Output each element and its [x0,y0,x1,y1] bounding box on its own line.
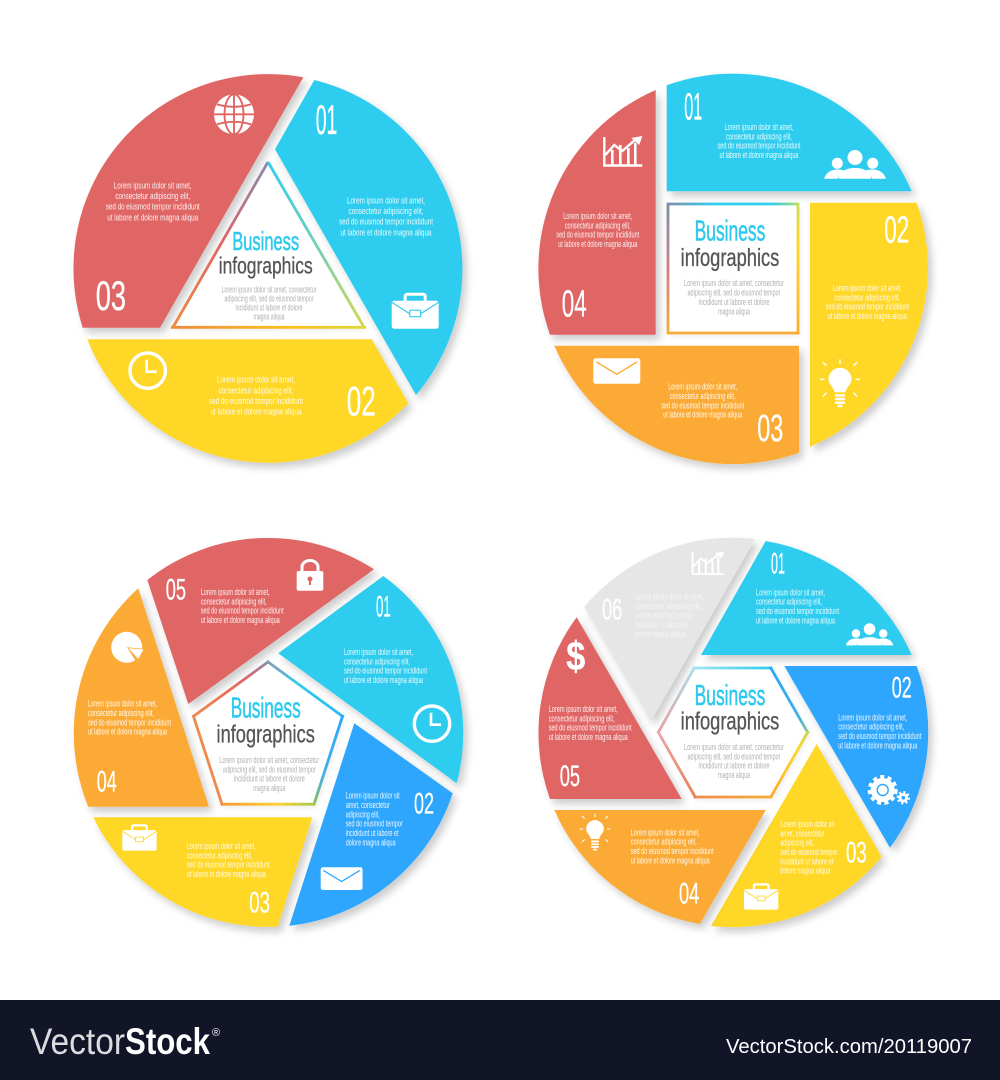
segment 03 red: sed do eiusmod tempor incididunt [106,202,200,213]
center pentagon: adipiscing elit, sed do eiusmod tempor [223,764,316,774]
center hexagon: Business [695,680,765,712]
center hexagon: adipiscing elit, sed do eiusmod tempor [688,751,780,761]
segment 02 yellow [810,203,928,447]
footer bar: VectorStock.com/20119007 [726,1036,972,1058]
segment 03 yellow: Lorem ipsum dolor sit amet, [187,841,256,851]
segment 03 red [73,74,303,328]
segment 01 blue: ut labore et dolore magna aliqua [720,150,798,160]
segment 02 blue: incididunt ut labore et [346,828,399,838]
segment 02 blue: Lorem ipsum dolor sit [346,791,400,801]
segment 04 orange: sed do eiusmod tempor incididunt [631,846,714,856]
segment 04 red: Lorem ipsum dolor sit amet, [563,211,632,221]
segment 02 blue: ut labore et dolore magna aliqua [838,740,917,750]
footer bar: Vector [30,1021,125,1062]
segment 01 cyan [701,541,912,655]
footer bar [0,1000,1000,1080]
segment 01 cyan: Lorem ipsum dolor sit amet, [344,647,413,657]
panel: three-step circle [73,74,462,463]
segment 06 grey [584,538,755,721]
segment 04 orange [554,810,766,924]
center triangle: infographics [219,252,313,278]
center square: Lorem ipsum dolor sit amet, consectetur [684,278,784,288]
segment 04 orange: 04 [679,877,699,910]
segment 01 cyan: ut labore et dolore magna aliqua [344,675,423,685]
center hexagon: incididunt ut labore et dolore [698,761,770,771]
segment 03 yellow: consectetur adipiscing elit, [187,850,253,860]
segment 02 yellow: sed do eiusmod tempor incididunt [209,396,303,407]
segment 01 cyan: Lorem ipsum dolor sit amet, [756,587,825,597]
panel: four-step circle [538,74,928,464]
segment 03 orange: Lorem ipsum dolor sit amet, [668,382,737,392]
center pentagon: incididunt ut labore et dolore [234,774,305,784]
icon: dollar sign: $ [566,633,585,679]
segment 05 red: consectetur adipiscing elit, [549,713,615,723]
segment 03 yellow [93,817,312,927]
segment 01 blue: Lorem ipsum dolor sit amet, [724,122,794,132]
segment 02 yellow: sed do eiusmod tempor incididunt [826,302,909,312]
segment 01 cyan: 01 [376,591,391,624]
segment 02 blue: 02 [892,672,912,705]
segment 05 red: 05 [166,574,186,607]
panel: five-step circle [74,538,463,927]
segment 03 yellow: adipiscing elit, [780,838,814,848]
segment 03 orange: sed do eiusmod tempor incididunt [661,400,745,410]
segment 05 red: consectetur adipiscing elit, [201,596,267,606]
segment 05 red: Lorem ipsum dolor sit amet, [201,587,270,597]
segment 03 yellow: dolore magna aliqua [780,866,830,876]
segment 01 cyan: consectetur adipiscing elit, [756,597,822,607]
segment 01 blue: consectetur adipiscing elit, [348,206,424,217]
segment 01 blue: 01 [684,86,702,128]
center hexagon: magna aliqua [718,770,750,780]
segment 03 red: ut labore et dolore magna aliqua [107,212,199,223]
segment 02 blue [784,666,928,848]
icon: padlock [297,560,323,591]
segment 04 red: consectetur adipiscing elit, [565,220,631,230]
segment 01 cyan: consectetur adipiscing elit, [344,656,410,666]
segment 02 blue: consectetur adipiscing elit, [838,722,904,732]
center hexagon [658,668,808,797]
segment 04 orange: consectetur adipiscing elit, [88,708,154,718]
segment 02 yellow: 02 [347,378,376,425]
segment 03 yellow: amet, consectetur [780,828,824,838]
segment 02 yellow: ut labore et dolore magna aliqua [210,407,302,418]
segment 02 blue: adipiscing elit, [346,809,380,819]
segment 01 cyan: 01 [771,548,785,581]
segment 06 grey: sed do eiusmod tempor [635,610,692,620]
segment 06 grey: dolore magna aliqua [635,629,685,639]
center pentagon [194,662,342,804]
segment 04 red: ut labore et dolore magna aliqua [558,239,637,249]
segment 03 orange: consectetur adipiscing elit, [670,391,736,401]
segment 03 yellow: 03 [846,837,867,870]
center square: Business [695,216,765,248]
segment 04 orange: Lorem ipsum dolor sit amet, [631,827,700,837]
segment 02 blue: Lorem ipsum dolor sit amet, [838,712,907,722]
segment 01 blue: sed do eiusmod tempor incididunt [339,217,433,228]
panel: six-step circle [538,538,928,927]
segment 02 blue: 02 [414,787,434,820]
segment 05 red: sed do eiusmod tempor incididunt [201,606,284,616]
center square: incididunt ut labore et dolore [698,297,770,307]
segment 02 blue: sed do eiusmod tempor incididunt [838,731,922,741]
segment 01 cyan: sed do eiusmod tempor incididunt [344,666,427,676]
segment 03 yellow: Lorem ipsum dolor sit [780,819,835,829]
center triangle [171,162,366,327]
segment 01 blue: Lorem ipsum dolor sit amet, [347,195,425,206]
segment 01 blue: sed do eiusmod tempor incididunt [718,141,801,151]
segment 01 cyan: ut labore et dolore magna aliqua [756,615,835,625]
segment 06 grey: 06 [602,594,622,627]
center hexagon: Lorem ipsum dolor sit amet, consectetur [684,742,784,752]
segment 04 orange: ut labore et dolore magna aliqua [631,855,710,865]
center triangle: magna aliqua [254,312,284,322]
segment 01 blue [275,80,462,395]
segment 01 cyan: sed do eiusmod tempor incididunt [756,606,839,616]
segment 03 yellow: ut labore et dolore magna aliqua [187,869,266,879]
segment 04 orange: 04 [97,766,117,799]
center pentagon: magna aliqua [253,783,285,793]
segment 02 yellow: ut labore et dolore magna aliqua [828,311,907,321]
icon: pie chart [111,632,145,663]
segment 01 cyan [278,576,463,783]
center triangle: Lorem ipsum dolor sit amet, consectetur [222,285,316,295]
segment 05 red: ut labore et dolore magna aliqua [201,615,280,625]
segment 03 orange [554,346,799,464]
segment 05 red: sed do eiusmod tempor incididunt [549,723,632,733]
segment 03 yellow: 03 [249,887,270,920]
segment 04 orange: consectetur adipiscing elit, [631,837,697,847]
segment 06 grey: incididunt ut labore et [635,620,689,630]
segment 03 yellow: sed do eiusmod tempor incididunt [187,860,270,870]
segment 04 orange: ut labore et dolore magna aliqua [88,727,167,737]
center square: magna aliqua [718,306,750,316]
segment 02 blue: dolore magna aliqua [346,837,396,847]
segment 03 yellow: sed do eiusmod tempor [780,847,837,857]
segment 05 red: ut labore et dolore magna aliqua [549,732,628,742]
segment 03 red: Lorem ipsum dolor sit amet, [114,180,192,191]
segment 05 red [538,617,682,799]
segment 05 red: Lorem ipsum dolor sit amet, [549,704,618,714]
segment 01 blue: consectetur adipiscing elit, [726,131,792,141]
segment 05 red [147,538,374,704]
center square [667,203,799,334]
center pentagon: infographics [217,720,315,748]
icon: gears [870,777,909,803]
segment 02 yellow: Lorem ipsum dolor sit amet, [833,283,902,293]
segment 05 red: 05 [560,760,580,793]
center triangle: adipiscing elit, sed do eiusmod tempor [224,294,314,304]
segment 04 orange [74,588,209,807]
segment 04 red [538,90,656,335]
segment 02 yellow: consectetur adipiscing elit, [834,292,900,302]
footer bar: ® [212,1027,220,1039]
segment 04 red: sed do eiusmod tempor incididunt [556,230,640,240]
segment 01 blue [667,74,912,191]
segment 04 orange: sed do eiusmod tempor incididunt [88,717,171,727]
segment 01 blue: ut labore et dolore magna aliqua [340,227,432,238]
center square: adipiscing elit, sed do eiusmod tempor [688,287,780,297]
segment 02 blue: sed do eiusmod tempor [346,819,403,829]
center hexagon: infographics [681,707,779,735]
segment 04 red: 04 [562,283,587,325]
segment 02 yellow: 02 [884,210,909,252]
segment 03 red: consectetur adipiscing elit, [115,191,190,202]
segment 03 yellow: incididunt ut labore et [780,856,834,866]
center pentagon: Business [231,693,301,725]
center pentagon: Lorem ipsum dolor sit amet, consectetur [219,755,319,765]
center triangle: incididunt ut labore et dolore [236,303,302,313]
segment 02 yellow: Lorem ipsum dolor sit amet, [217,375,295,386]
segment 01 blue: 01 [316,96,337,143]
footer bar: Stock [125,1021,210,1062]
segment 06 grey: Lorem ipsum dolor sit amet, [635,592,704,602]
segment 02 blue: amet, consectetur [346,800,390,810]
segment 03 orange: ut labore et dolore magna aliqua [663,410,742,420]
segment 03 red: 03 [96,272,126,319]
segment 02 yellow: consectetur adipiscing elit, [218,385,294,396]
segment 03 orange: 03 [757,408,783,450]
segment 03 yellow [711,744,882,927]
segment 02 blue [289,723,453,926]
icon: globe [214,94,254,134]
center square: infographics [681,244,779,272]
segment 04 orange: Lorem ipsum dolor sit amet, [88,699,157,709]
segment 06 grey: consectetur adipiscing elit, [635,601,701,611]
segment 02 yellow [87,339,408,463]
center triangle: Business [232,226,299,256]
